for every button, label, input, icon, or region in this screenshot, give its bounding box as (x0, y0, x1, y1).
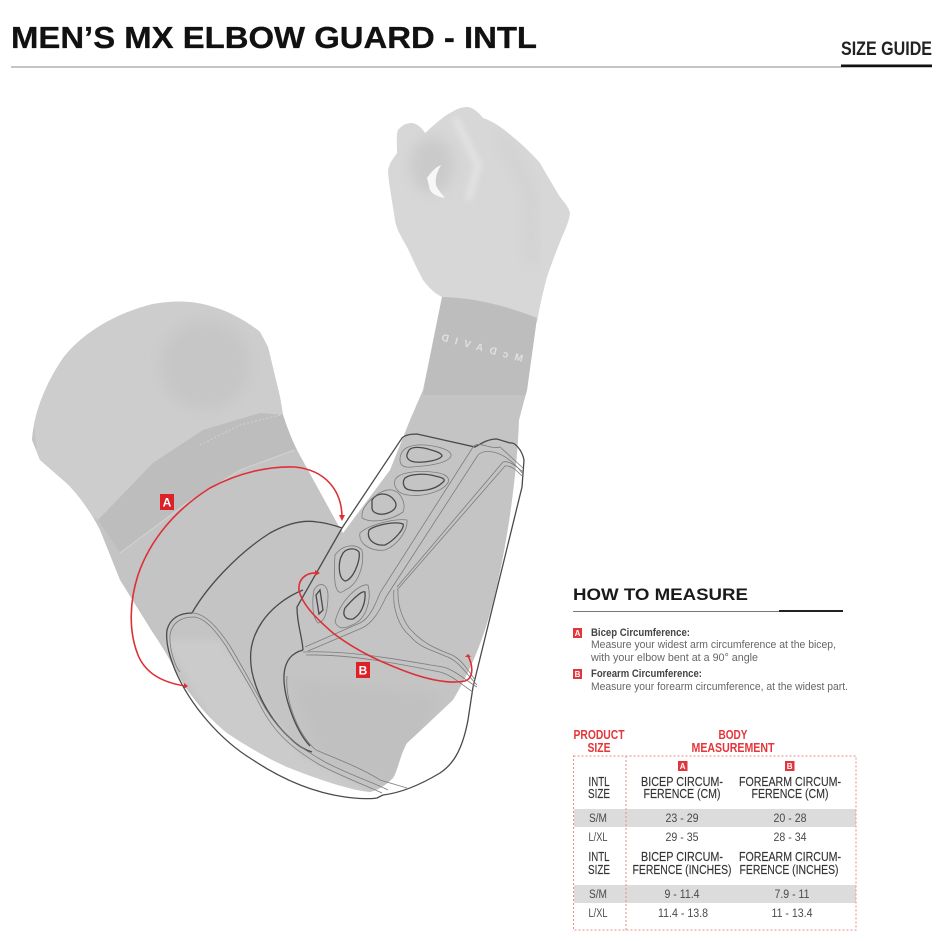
label B: B (359, 664, 368, 678)
size table (574, 728, 856, 930)
cm values: 23 - 29 (666, 813, 698, 825)
inches headers: BICEP CIRCUM- (641, 849, 723, 864)
inches headers (588, 849, 841, 877)
cm headers: INTL (588, 774, 610, 789)
header rule (11, 64, 932, 68)
inches headers: INTL (588, 849, 610, 864)
badge A: A (680, 762, 686, 771)
instruction A: with your elbow bent at a 90° angle (590, 652, 758, 664)
grey rows (574, 809, 856, 903)
instruction B: B (575, 670, 581, 679)
column headings (574, 728, 775, 755)
cm headers: BICEP CIRCUM- (641, 774, 723, 789)
instruction B: Measure your forearm circumference, at the widest part. (591, 681, 848, 693)
badge A (678, 761, 688, 771)
measurement arc B (299, 570, 472, 682)
forearm pads (407, 447, 442, 462)
elbow guard outline (167, 434, 524, 799)
instruction A: Bicep Circumference: (591, 627, 690, 639)
inches values: 11.4 - 13.8 (658, 908, 708, 920)
inches values: 11 - 13.4 (772, 908, 813, 920)
sleeve band (204, 413, 297, 450)
cm values: 29 - 35 (666, 832, 698, 844)
inches values: S/M (589, 889, 607, 901)
inches values: L/XL (588, 908, 608, 920)
how to measure panel (573, 585, 848, 693)
inches headers: FERENCE (INCHES) (740, 862, 838, 877)
label A (160, 494, 174, 510)
inches headers: FERENCE (INCHES) (632, 862, 732, 877)
instruction A: A (575, 629, 581, 638)
column headings: BODY (718, 728, 748, 742)
inches values (588, 889, 813, 920)
instruction A: Measure your widest arm circumference at the bicep, (591, 639, 836, 651)
inches values: 9 - 11.4 (664, 889, 700, 901)
column headings: MEASUREMENT (692, 741, 775, 755)
upper arm shading (34, 302, 283, 520)
sleeve logo: McDAVID (440, 333, 524, 365)
cm values: S/M (589, 813, 607, 825)
cm values: L/XL (588, 832, 608, 844)
label A: A (163, 496, 172, 510)
badge B: B (787, 762, 793, 771)
table border (574, 756, 856, 930)
badge B (785, 761, 794, 771)
forearm strap lines (305, 444, 523, 647)
inches headers: FOREARM CIRCUM- (739, 849, 841, 864)
instruction B: Forearm Circumference: (591, 668, 702, 680)
cm values: 20 - 28 (774, 813, 806, 825)
cm headers: FOREARM CIRCUM- (739, 774, 841, 789)
lower elbow light area (212, 720, 364, 792)
cm headers: FERENCE (CM) (752, 786, 828, 801)
column headings: SIZE (588, 741, 610, 755)
cm headers: SIZE (588, 786, 610, 801)
inches values: 7.9 - 11 (774, 889, 810, 901)
cm values: 28 - 34 (774, 832, 807, 844)
hand (388, 107, 570, 322)
finger gap (427, 165, 445, 198)
instruction B (573, 668, 848, 693)
column headings: PRODUCT (574, 728, 625, 742)
heading rule (573, 610, 843, 612)
title: MEN’S MX ELBOW GUARD - INTL (11, 20, 537, 55)
label B (356, 662, 370, 678)
how to measure heading: HOW TO MEASURE (573, 585, 748, 604)
cm headers (588, 774, 841, 801)
arm silhouette (20, 290, 550, 810)
measurement arc A (131, 467, 345, 689)
wrist band (436, 297, 536, 395)
arm illustration (20, 107, 570, 810)
inches headers: SIZE (588, 862, 610, 877)
cm values (588, 813, 807, 844)
cm headers: FERENCE (CM) (644, 786, 720, 801)
instruction A (573, 627, 836, 664)
